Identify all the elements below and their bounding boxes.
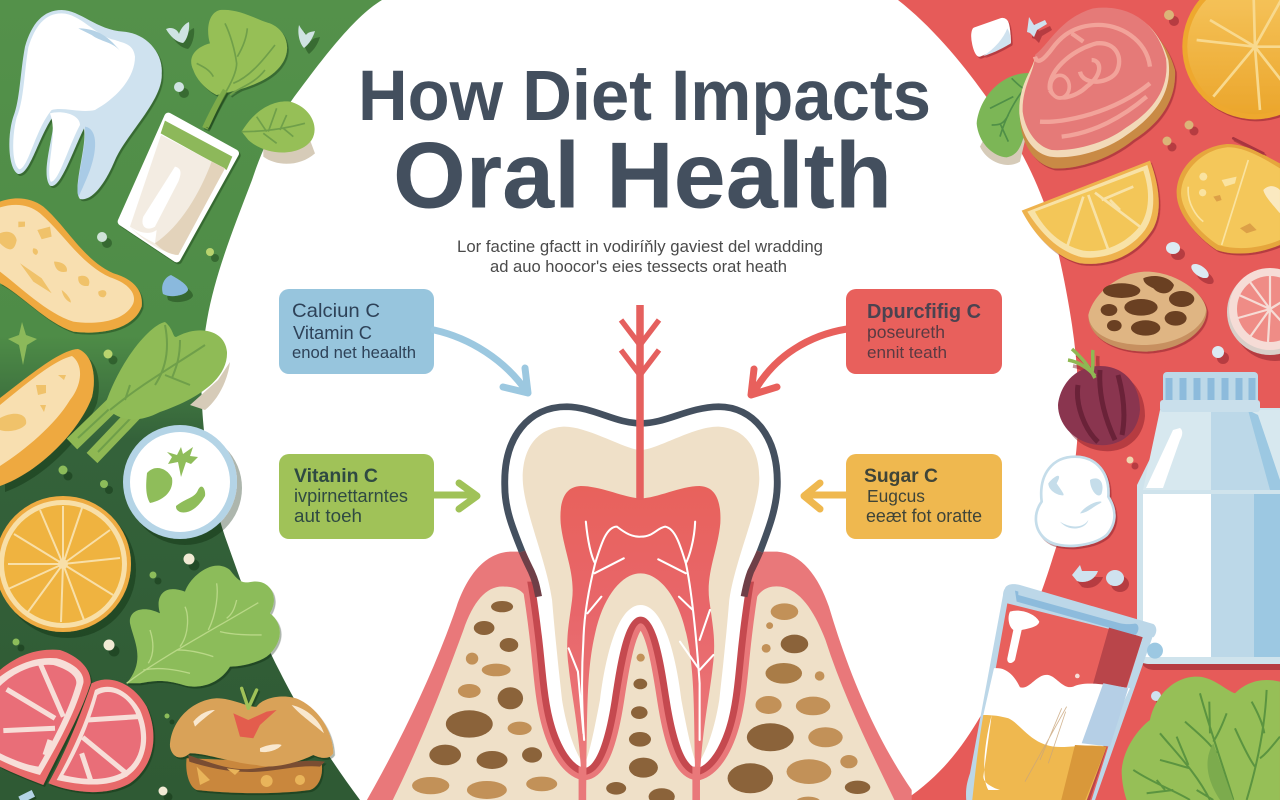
icon: bread slice	[0, 198, 142, 333]
icon: bowl with herbs	[123, 425, 237, 539]
callout: vitamin: aut toeh	[294, 506, 362, 526]
dentin	[523, 427, 759, 765]
tooth crown outline	[505, 407, 777, 552]
jaw bone	[393, 586, 894, 800]
callout: harmful: ennit teath	[867, 343, 947, 362]
panel: green healthy foods background	[0, 0, 382, 800]
callout: calcium: Vitamin C	[293, 323, 372, 343]
icon: molar tooth	[9, 10, 162, 199]
icon: glass of milk	[122, 90, 235, 258]
callout: sugar: eeæt fot oratte	[866, 506, 982, 526]
callout: vitamin	[279, 454, 434, 539]
icon: second bread slice	[0, 349, 94, 486]
icon: small spinach leaf	[242, 101, 315, 164]
callout: calcium: enod net heaalth	[292, 343, 416, 362]
gum tissue	[367, 552, 912, 800]
arrow: calcium to tooth	[434, 330, 528, 393]
callout: sugar	[846, 454, 1002, 539]
outline through gum	[522, 552, 760, 597]
icon: left dots	[12, 466, 194, 796]
callout: harmful	[846, 289, 1002, 374]
icon: sugar cube	[974, 21, 1011, 56]
icon: green sparkle	[8, 322, 37, 365]
icon: muffin	[170, 688, 333, 793]
root pink periodontal band	[531, 567, 750, 768]
title: How Diet Impacts	[358, 57, 931, 136]
title: Oral Health	[393, 122, 892, 228]
icon: bread crumb interior	[0, 356, 80, 466]
title	[358, 57, 931, 228]
icon: juice jar	[966, 584, 1163, 800]
icon: orange	[1182, 0, 1280, 119]
callout: sugar: Sugar C	[864, 465, 938, 487]
subtitle text block: Lor factine gfactt in vodiríňly gaviest del wradding	[457, 238, 823, 256]
arrow: sugar to tooth	[804, 483, 847, 509]
icon: oak lettuce leaf	[127, 566, 280, 687]
icon: small grapefruit slice	[1227, 268, 1280, 355]
callout: harmful: Dpurcfifig C	[867, 300, 981, 323]
root dark ligament	[531, 567, 750, 768]
subtitle text block: ad auo hoocor's eies tessects orat heath	[490, 258, 787, 276]
icon: bread holes	[0, 375, 66, 431]
callout: vitamin: Vitanin C	[294, 466, 378, 487]
callout: sugar: Eugcus	[867, 486, 925, 506]
left food illustrations	[0, 10, 333, 800]
icon: orange slice	[0, 496, 131, 632]
icon: milk bottle	[1137, 372, 1280, 664]
icon: steak	[1019, 8, 1175, 168]
right food illustrations	[966, 0, 1280, 800]
icon: lettuce	[1122, 677, 1280, 800]
callout: harmful: poseureth	[867, 322, 945, 342]
icon: basil leaf	[977, 73, 1040, 165]
panel: red harmful foods background	[898, 0, 1280, 800]
icon: plum with stem	[1058, 349, 1140, 445]
bone pores	[412, 601, 870, 800]
icon: small crumbs	[1027, 10, 1278, 701]
icon: grapefruit halves	[0, 650, 153, 800]
arrow: harmful to tooth	[751, 329, 847, 395]
tooth enamel	[505, 407, 777, 768]
root tips	[582, 767, 696, 800]
nerves	[569, 522, 713, 740]
icon: celery and leafy greens	[72, 322, 230, 458]
icon: spinach leaf	[191, 10, 287, 128]
icon: lemon wedge	[1022, 161, 1159, 264]
callout: calcium: Calciun C	[292, 300, 380, 322]
icon: green hearts and dots	[97, 22, 315, 358]
icon: cream blob	[1036, 457, 1114, 546]
callout: calcium	[279, 289, 434, 374]
tooth cross-section diagram	[367, 407, 912, 800]
icon: cheese bread	[1177, 138, 1280, 254]
callout: vitamin: ivpirnettarntes	[294, 486, 408, 506]
icon: red nerve stem with chevrons	[621, 305, 659, 500]
arrow: vitamin to tooth	[434, 483, 477, 509]
subtitle text block	[457, 238, 823, 276]
pulp chamber	[560, 486, 720, 800]
icon: chocolate chip cookie	[1088, 272, 1207, 352]
